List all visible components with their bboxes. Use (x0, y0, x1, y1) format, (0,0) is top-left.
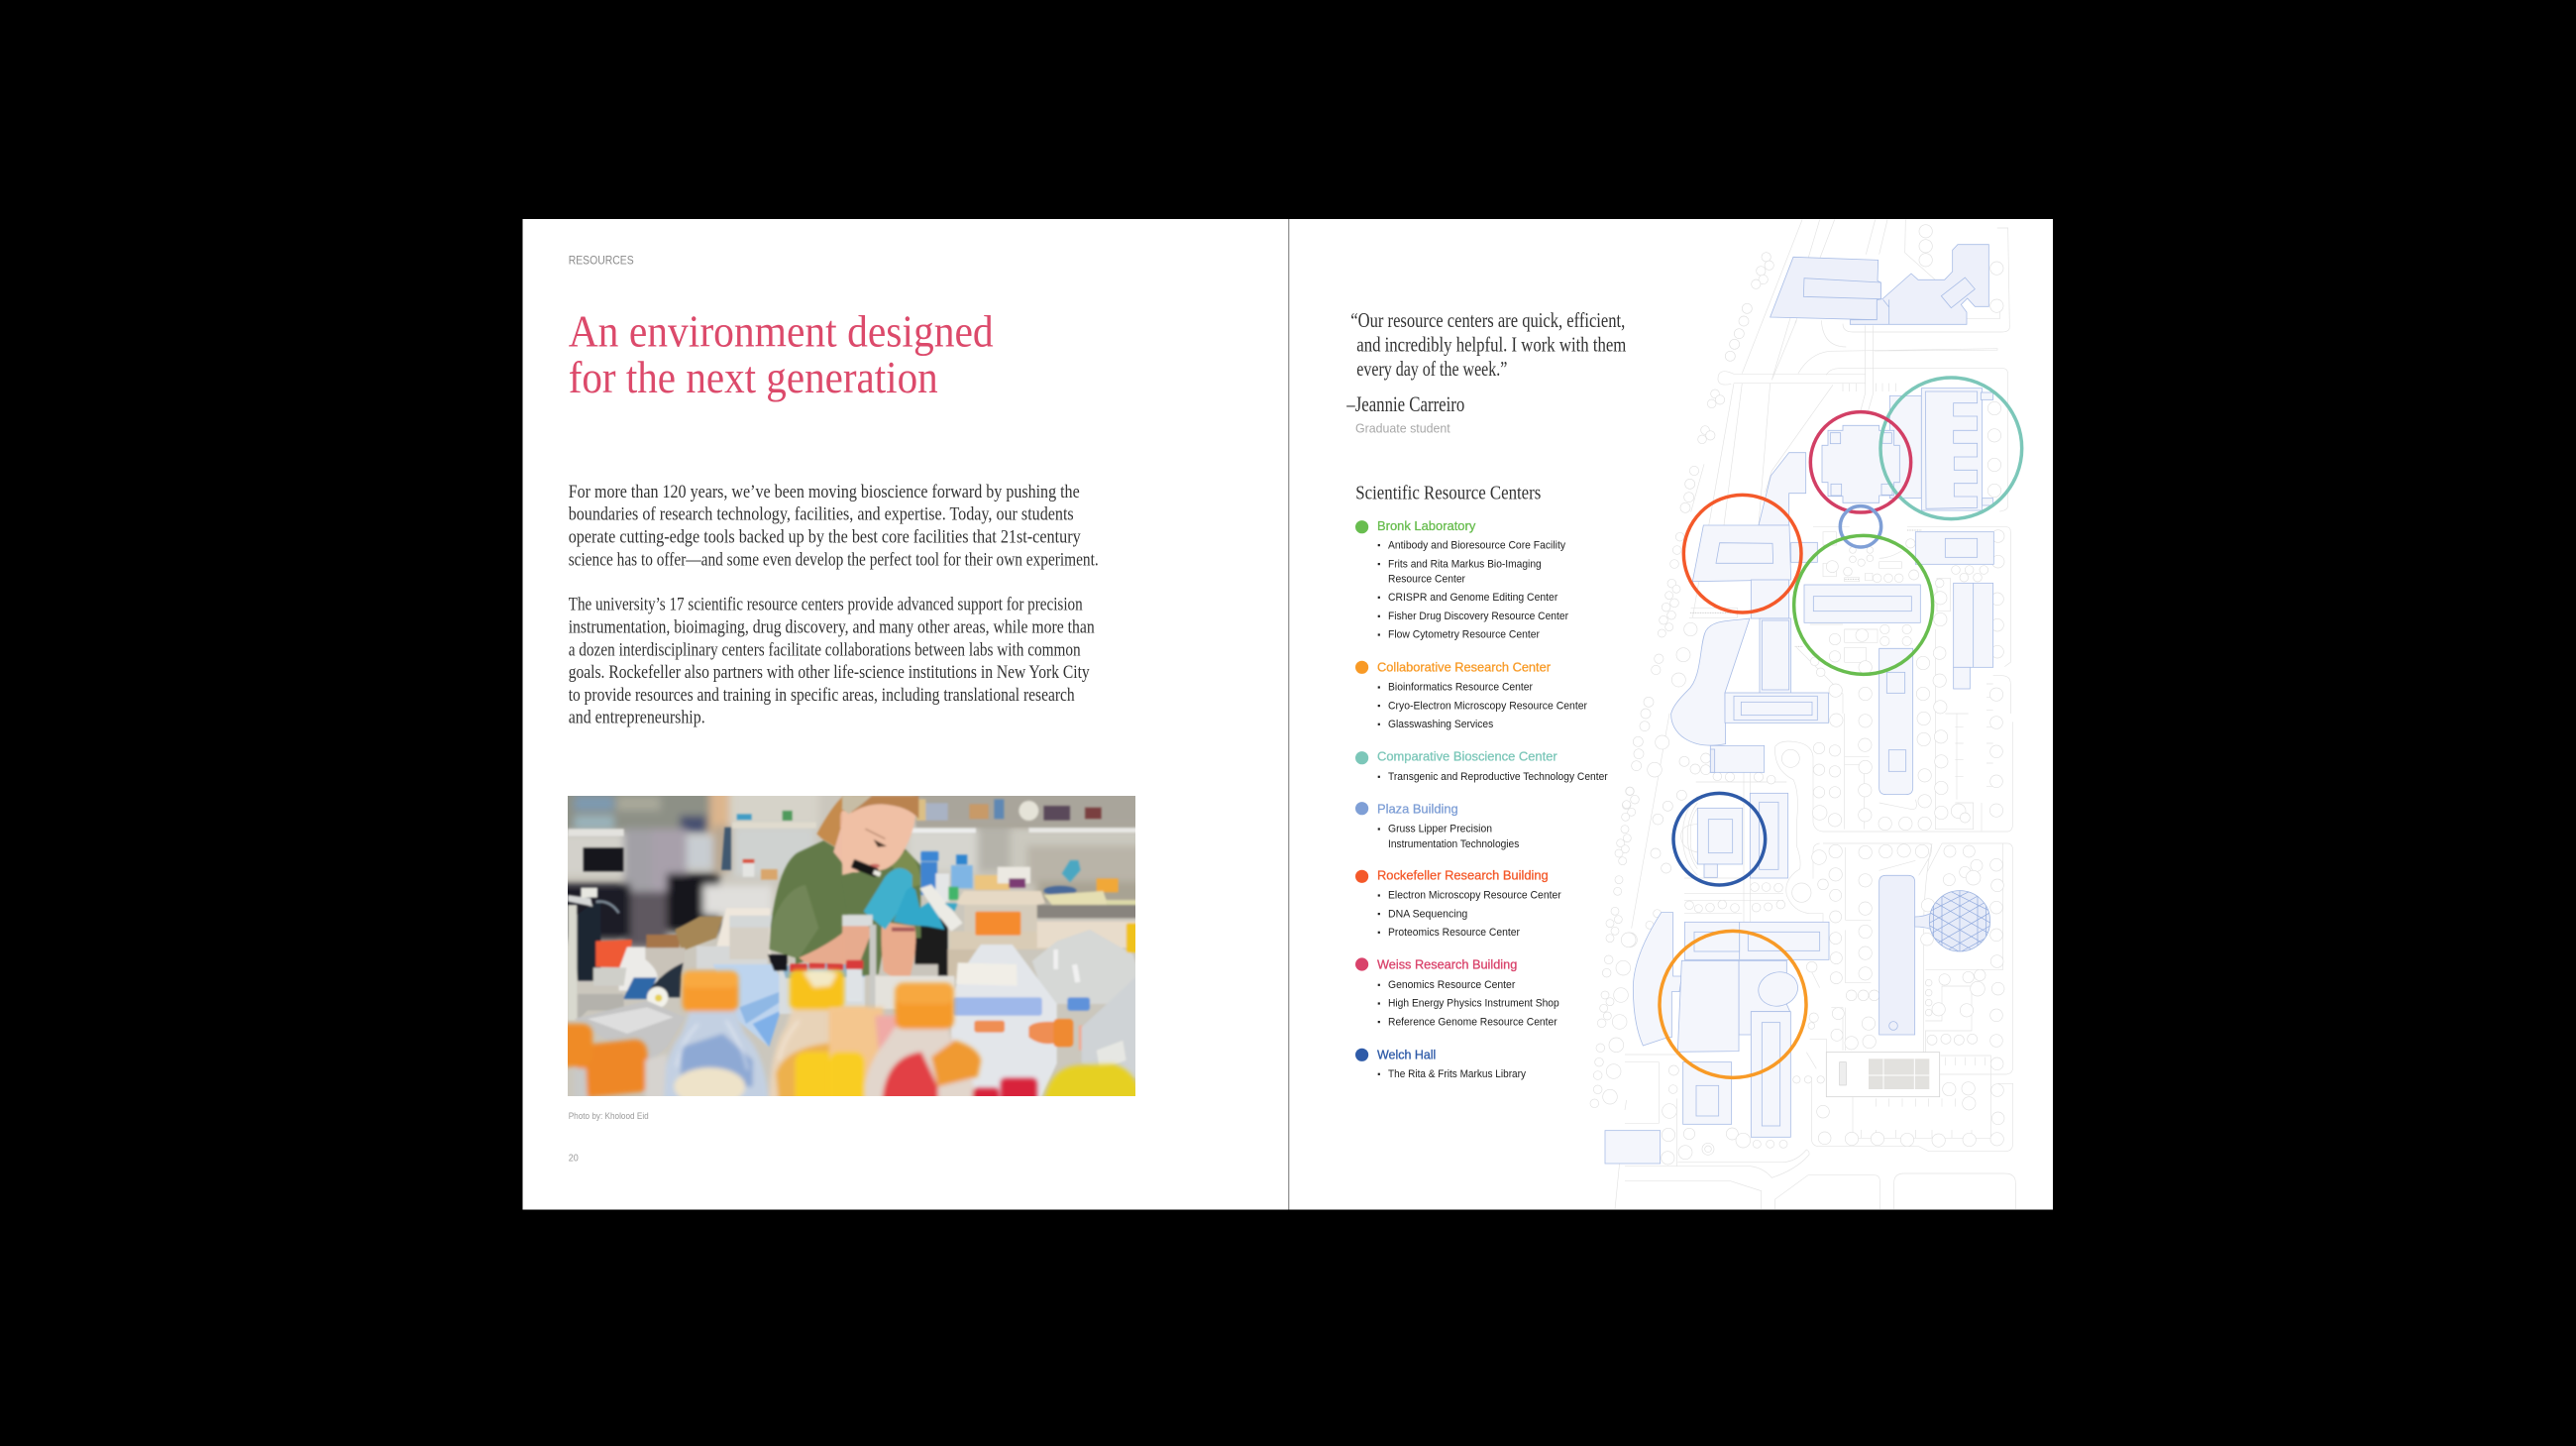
text block: second paragraph: a dozen interdisciplinary centers facilitate collaborations between labs with common (569, 640, 1081, 660)
quote attribution: –Jeannie Carreiro (1346, 391, 1464, 416)
legend: Bronk Laboratory: CRISPR and Genome Editing Center (1388, 592, 1558, 604)
legend: Comparative Bioscience Center: Comparative Bioscience Center (1377, 749, 1557, 764)
section label: RESOURCES (569, 253, 634, 267)
title: for the next generation (569, 352, 938, 402)
text block: intro paragraph: For more than 120 years, we’ve been moving bioscience forward by pushing the (569, 483, 1080, 502)
attribution role: Graduate student (1355, 421, 1450, 436)
text block: second paragraph: instrumentation, bioimaging, drug discovery, and many other areas, while more than (569, 618, 1095, 638)
legend: Rockefeller Research Building: Rockefeller Research Building (1377, 868, 1549, 883)
legend: Bronk Laboratory: Frits and Rita Markus Bio-Imaging (1388, 558, 1542, 570)
legend: Plaza Building (1355, 802, 1520, 850)
map roads: south section (1615, 714, 2015, 1209)
text block: second paragraph: The university’s 17 scientific resource centers provide advanced support for precision (569, 596, 1083, 615)
legend: Weiss Research Building: Weiss Research Building (1377, 957, 1517, 972)
map trees (1641, 225, 2004, 719)
legend: Comparative Bioscience Center (1355, 749, 1608, 783)
quote (1350, 308, 1626, 381)
map buildings: south section (1605, 745, 1991, 1164)
quote: “Our resource centers are quick, efficient, (1350, 308, 1625, 332)
text block: second paragraph: to provide resources and training in specific areas, including translational research (569, 686, 1075, 706)
quote: every day of the week.” (1356, 357, 1507, 381)
legend: Collaborative Research Center: Bioinformatics Resource Center (1388, 682, 1533, 694)
legend: Plaza Building: Gruss Lipper Precision (1388, 824, 1492, 835)
text block: intro paragraph: boundaries of research technology, facilities, and expertise. Today, our students (569, 505, 1074, 525)
legend: Bronk Laboratory: Fisher Drug Discovery Resource Center (1388, 611, 1568, 622)
legend: Collaborative Research Center (1355, 659, 1587, 730)
legend: Plaza Building: Plaza Building (1377, 802, 1458, 817)
title: An environment designed (569, 305, 994, 356)
campus map (1590, 220, 2022, 1209)
legend: Weiss Research Building: High Energy Physics Instrument Shop (1388, 998, 1559, 1010)
text block: intro paragraph: science has to offer—and some even develop the perfect tool for their own experiment. (569, 550, 1099, 570)
legend: Welch Hall (1355, 1047, 1526, 1080)
legend: Bronk Laboratory: Resource Center (1388, 573, 1465, 585)
text block: intro paragraph (569, 483, 1099, 570)
text block: intro paragraph: operate cutting-edge tools backed up by the best core facilities that 21st-century (569, 527, 1081, 547)
legend: Welch Hall: The Rita & Frits Markus Library (1388, 1068, 1526, 1080)
map buildings: north section (1671, 245, 1993, 795)
text block: second paragraph (569, 596, 1095, 728)
legend: Bronk Laboratory (1355, 518, 1568, 641)
title (569, 305, 994, 402)
legend: Collaborative Research Center: Glasswashing Services (1388, 719, 1494, 730)
text block: second paragraph: and entrepreneurship. (569, 709, 705, 728)
panel: white page spread (523, 219, 2053, 1209)
map location ring: Plaza Building (1840, 506, 1881, 547)
legend: Weiss Research Building: Genomics Resource Center (1388, 979, 1516, 991)
page number: 20 (569, 1154, 579, 1165)
legend: Rockefeller Research Building: Proteomics Resource Center (1388, 927, 1520, 939)
map trees: south section (1590, 712, 2004, 1165)
hatch marks (1690, 530, 1922, 646)
legend: Bronk Laboratory: Flow Cytometry Resource Center (1388, 629, 1540, 641)
legend: Collaborative Research Center: Collaborative Research Center (1377, 659, 1552, 674)
map location ring: Comparative Bioscience Center (1880, 378, 2022, 519)
map location ring: Weiss Research Building (1810, 412, 1911, 512)
legend: Plaza Building: Instrumentation Technologies (1388, 838, 1520, 850)
legend: Bronk Laboratory: Antibody and Bioresource Core Facility (1388, 539, 1565, 551)
page spine divider (1288, 219, 1289, 1209)
map roads and paths (1689, 220, 2010, 714)
map location ring: Bronk Laboratory (1794, 535, 1933, 674)
legend: Rockefeller Research Building: Electron Microscopy Resource Center (1388, 890, 1561, 902)
legend: Rockefeller Research Building: DNA Sequencing (1388, 908, 1467, 920)
map location ring: Welch Hall (1673, 793, 1766, 885)
map location ring: Rockefeller Research Building (1683, 495, 1801, 612)
legend: Welch Hall: Welch Hall (1377, 1047, 1436, 1061)
photo credit: Photo by: Kholood Eid (569, 1111, 649, 1122)
legend heading: Scientific Resource Centers (1355, 482, 1541, 503)
text block: second paragraph: goals. Rockefeller also partners with other life-science institutions in New York City (569, 663, 1090, 683)
legend: Rockefeller Research Building (1355, 868, 1561, 939)
quote: and incredibly helpful. I work with them (1356, 332, 1626, 356)
legend: Weiss Research Building: Reference Genome Resource Center (1388, 1016, 1557, 1028)
legend: Collaborative Research Center: Cryo-Electron Microscopy Resource Center (1388, 700, 1587, 712)
legend: Bronk Laboratory: Bronk Laboratory (1377, 518, 1476, 533)
map location ring: Collaborative Research Center (1660, 931, 1806, 1077)
legend: Comparative Bioscience Center: Transgenic and Reproductive Technology Center (1388, 771, 1608, 783)
legend: Weiss Research Building (1355, 957, 1559, 1028)
photo: researcher at a lab bench with bottles (568, 796, 1135, 1096)
